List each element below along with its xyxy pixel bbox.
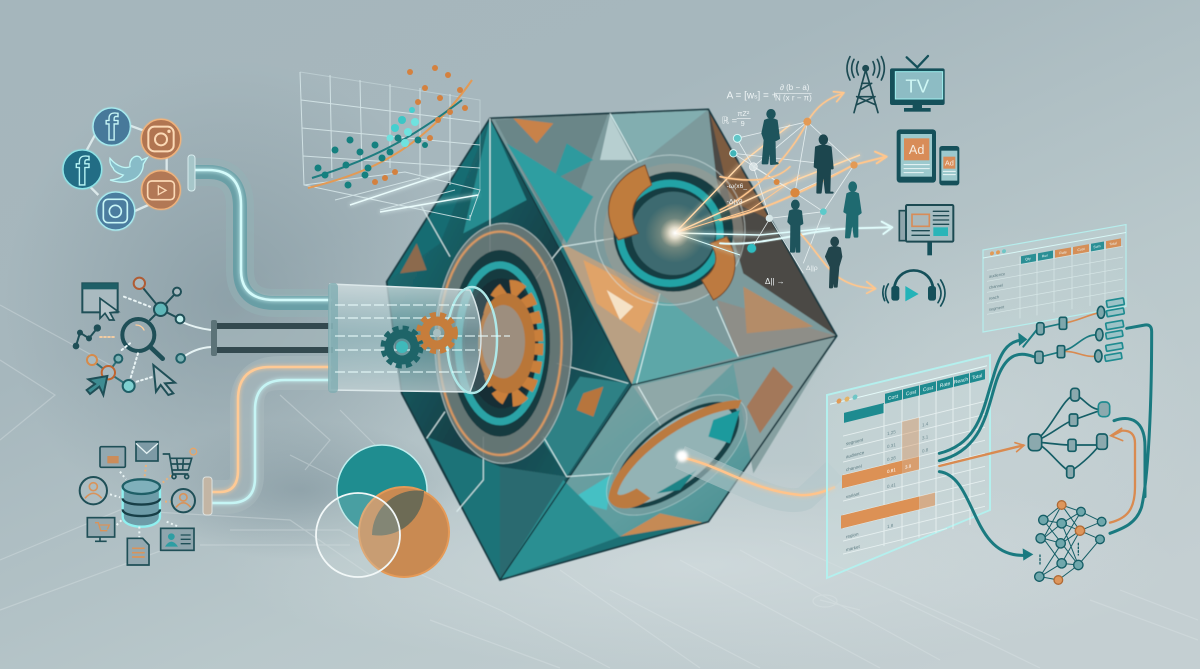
connection ring (85, 125, 167, 212)
header row: Cost (906, 389, 917, 398)
icon: instagram blue (97, 192, 135, 230)
pipe: social media (188, 155, 332, 303)
main data table panel: 3.9 (905, 463, 912, 470)
decision tree diagram (1035, 298, 1124, 363)
main data table panel: 1.25 (887, 429, 896, 436)
table glass (827, 355, 990, 578)
crystal formula scrawls: -ω(x6_ (727, 183, 747, 190)
formula text: 9 (741, 119, 745, 128)
icon: document (127, 538, 149, 565)
highlighted cells (841, 414, 935, 529)
main data table panel: market (846, 544, 860, 552)
icon: shopping cart (163, 448, 197, 479)
highlight lines (422, 113, 738, 512)
header row: Rate (1059, 250, 1067, 255)
pipes from data sources (160, 155, 335, 515)
icon: twitter bird (110, 156, 147, 182)
upper data table panel: channel (989, 282, 1003, 290)
ring: lower right face (586, 372, 767, 538)
header row: Reach (954, 376, 968, 386)
data arrows (720, 92, 892, 293)
main data table panel (827, 355, 990, 578)
branching network diagram (1028, 388, 1110, 478)
crystal formula scrawls: Δ||ρ (806, 265, 818, 272)
person 3 (788, 201, 802, 252)
icon: envelope (136, 442, 158, 461)
icon: video play (142, 171, 180, 209)
icon: tablet ad: Ad (909, 143, 924, 157)
header row: Total (972, 373, 982, 382)
ring: upper right face (595, 155, 745, 305)
formula text: πZ² (737, 109, 750, 118)
output pipe from crystal to table (676, 450, 835, 500)
header row: Cost (1077, 247, 1085, 252)
scatter chart (300, 65, 480, 220)
orange data points (372, 65, 468, 185)
teal data points (314, 107, 428, 188)
person 5 (826, 238, 841, 287)
main data table panel: 0.81 (887, 467, 896, 474)
neural network diagram (1035, 501, 1106, 584)
media output icons (847, 56, 959, 306)
main data table panel: 0.28 (887, 455, 896, 462)
icon: profile card (161, 528, 194, 550)
icon: audio headphones (883, 270, 945, 306)
icon: database (123, 479, 160, 527)
large orange gear (478, 288, 535, 398)
icon: small window (100, 447, 125, 467)
icon: magnifying glass (122, 319, 163, 359)
main data table panel: channel (846, 464, 862, 472)
table glass (983, 225, 1126, 332)
trend line icon (74, 325, 100, 348)
icon: television (890, 56, 945, 112)
cell grid (843, 379, 985, 556)
header row: Rate (940, 381, 950, 389)
people silhouettes (762, 110, 861, 287)
formula text (722, 83, 812, 128)
header row: Total (1109, 241, 1117, 247)
main data table panel: audience (846, 450, 865, 459)
person 4 (844, 182, 861, 237)
hexagonal glass crystal (387, 109, 837, 580)
icon: user right (172, 489, 195, 512)
formula text: A = [ws] = + (727, 91, 778, 102)
feedback loop orange (1110, 428, 1135, 523)
header row (1021, 238, 1121, 264)
icon: tablet ad (897, 129, 936, 183)
icon: user left (80, 477, 107, 504)
upper data table panel: segment (989, 304, 1005, 312)
formula text: ℝ = (722, 115, 737, 125)
pipe: databases (203, 367, 332, 515)
icon: browser window (82, 283, 118, 320)
data spectrum beam from burst (675, 125, 860, 255)
flow arrows and model diagrams (939, 298, 1152, 584)
icon: phone ad (939, 146, 959, 185)
click graph with pointers (87, 343, 185, 395)
icon: broadcast tower (847, 57, 884, 113)
face: lower right (500, 336, 837, 580)
upper data table panel: audience (989, 271, 1006, 279)
social media icon cluster (63, 106, 181, 230)
crystal edges (387, 109, 837, 580)
crystal formula scrawls (727, 183, 818, 286)
cell grid (987, 238, 1123, 324)
header row (844, 369, 985, 423)
icon: facebook top: f (105, 106, 118, 148)
main data table panel: variant (846, 491, 860, 499)
formula text: Ν (x r − π) (775, 94, 812, 103)
header row: Run (1042, 253, 1048, 259)
icon: television: TV (905, 76, 930, 97)
glass cylinder feeding the crystal (328, 283, 520, 393)
orange gear (418, 314, 456, 352)
network nodes (124, 278, 184, 323)
main data table panel: 3.1 (922, 434, 929, 441)
header row: Sum (1093, 244, 1101, 249)
overlapping venn circles (316, 445, 449, 577)
pipe: web analytics (160, 320, 335, 358)
main data table panel: region (846, 531, 859, 539)
icon: newspaper (899, 205, 953, 255)
formula text: ∂ (b − a) (780, 83, 810, 92)
person 1 (762, 110, 779, 164)
face: left dark (387, 118, 632, 580)
header row: Cost (923, 385, 934, 393)
upper data table panel (983, 225, 1126, 332)
crystal formula scrawls: Δ|| → (765, 277, 785, 286)
web analytics icon cluster (74, 278, 185, 395)
chart frame (300, 72, 480, 220)
network mesh (733, 122, 854, 273)
header row: Cost (888, 393, 899, 402)
icon: instagram orange (141, 119, 181, 159)
ring: left face with gear (435, 223, 572, 463)
main data table panel: 1.8 (887, 523, 894, 529)
main data table panel: segment (846, 437, 864, 446)
main data table panel: 0.31 (887, 442, 896, 449)
person 2 (815, 135, 833, 193)
customer database icon cluster (80, 442, 197, 565)
icon: facebook left: f (76, 150, 90, 194)
light burst (645, 203, 705, 263)
face: upper right (490, 109, 837, 385)
audience network (720, 83, 892, 293)
icon: monitor cart (87, 518, 115, 541)
feedback loop teal (1110, 325, 1152, 533)
header row: Qty (1025, 256, 1031, 261)
teal gear (383, 328, 421, 366)
main data table panel: 0.41 (887, 482, 896, 489)
main data table panel: 0.8 (922, 447, 929, 454)
regression lines (308, 80, 472, 188)
network nodes (730, 118, 858, 253)
chart light rays into crystal (350, 170, 478, 212)
icon: phone ad: Ad (945, 158, 954, 167)
orange flow arrow (939, 443, 1024, 466)
crystal formula scrawls: -Δ(γ3 (727, 198, 743, 205)
dotted connectors (110, 465, 178, 537)
teal flow arrows from table (939, 330, 1037, 555)
upper data table panel: reach (989, 294, 999, 301)
main data table panel: 1.4 (922, 421, 929, 428)
